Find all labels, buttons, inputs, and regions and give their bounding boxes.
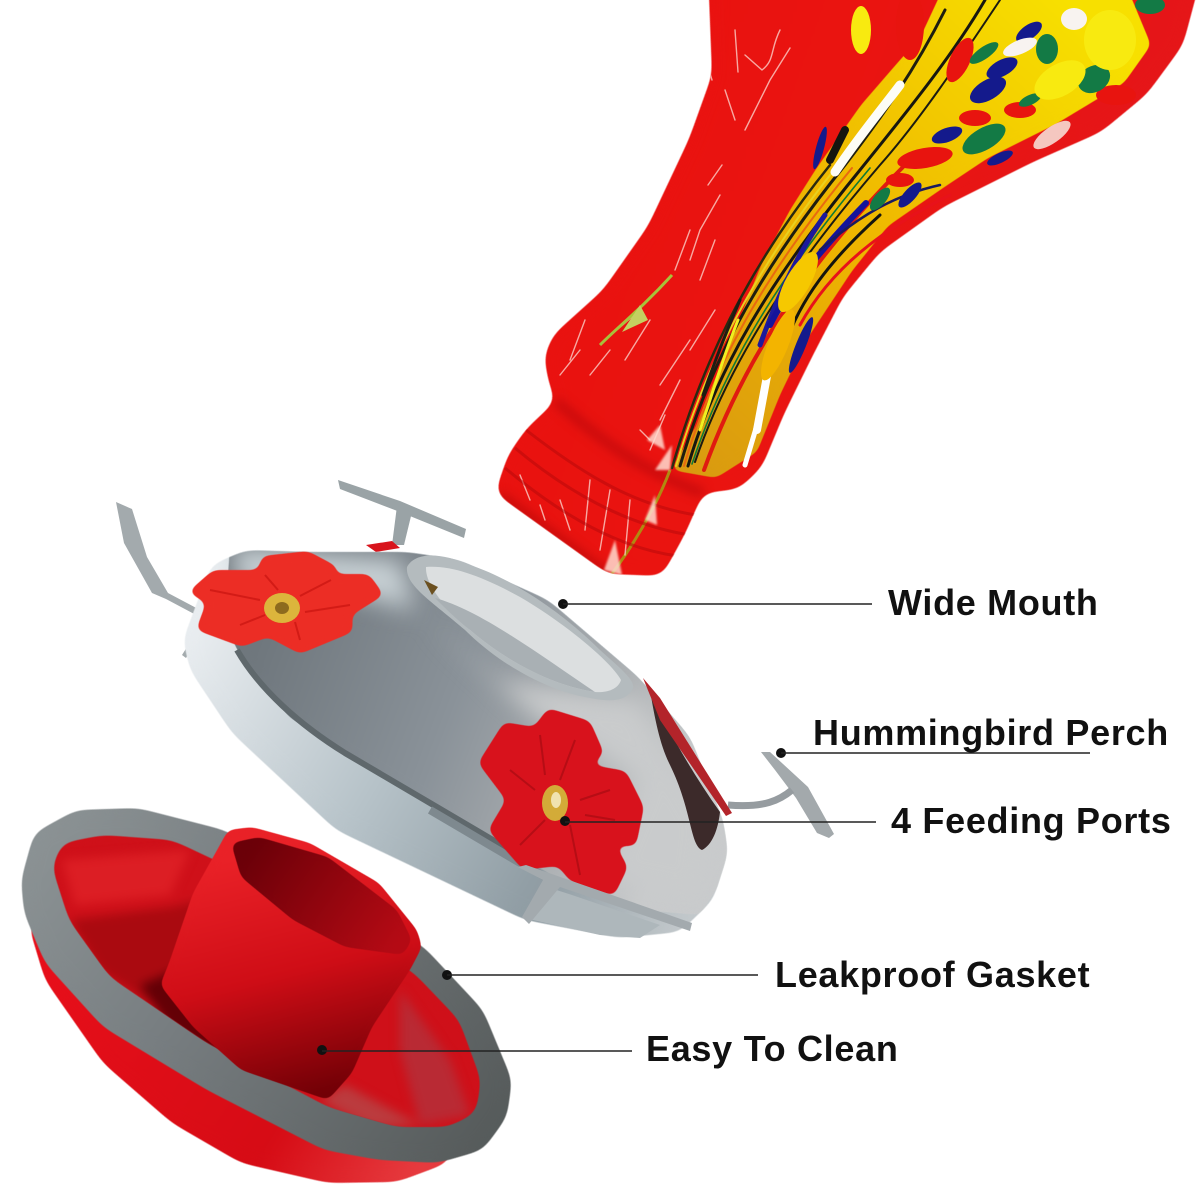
callout: Leakproof Gasket [442,954,1090,995]
callout: Easy To Clean: Easy To Clean [646,1028,899,1069]
callout: Wide Mouth: Wide Mouth [888,582,1099,623]
white flecks in the red glass [520,30,790,555]
wide mouth ring [407,555,633,700]
cone light top [226,550,662,859]
perch: right [728,752,834,838]
yellow blobs [754,6,1136,384]
dark flange reflection [650,690,720,850]
callout: Easy To Clean [317,1028,899,1069]
callout: 4 Feeding Ports [560,800,1172,841]
center tube [160,827,422,1100]
perch: top [338,480,466,552]
green glass chips [866,0,1165,214]
callout: 4 Feeding Ports: 4 Feeding Ports [891,800,1172,841]
perch: front [518,865,692,938]
callout: Hummingbird Perch: Hummingbird Perch [813,712,1169,753]
white glass chips [1001,8,1087,154]
flower: top-left port [188,551,384,654]
callout: Leakproof Gasket: Leakproof Gasket [775,954,1090,995]
flower: front port [478,708,644,896]
cone body [225,540,740,915]
blue glass chips [785,18,1045,375]
shaded glass edges [500,401,703,575]
tube opening [231,837,412,955]
base bowl [21,808,512,1183]
glass bottle [495,0,1200,576]
callout: Wide Mouth [558,582,1099,623]
neck ridges [505,430,696,556]
perch: left [116,502,203,658]
gasket ring [21,808,512,1163]
bowl interior [52,835,481,1127]
radiating glass streaks [672,0,1000,470]
yellow colour fan [671,0,1151,478]
red patches in fan [886,29,1136,187]
neck colour thread [611,470,670,575]
wide mouth opening [426,567,621,692]
metal cover [183,540,740,938]
